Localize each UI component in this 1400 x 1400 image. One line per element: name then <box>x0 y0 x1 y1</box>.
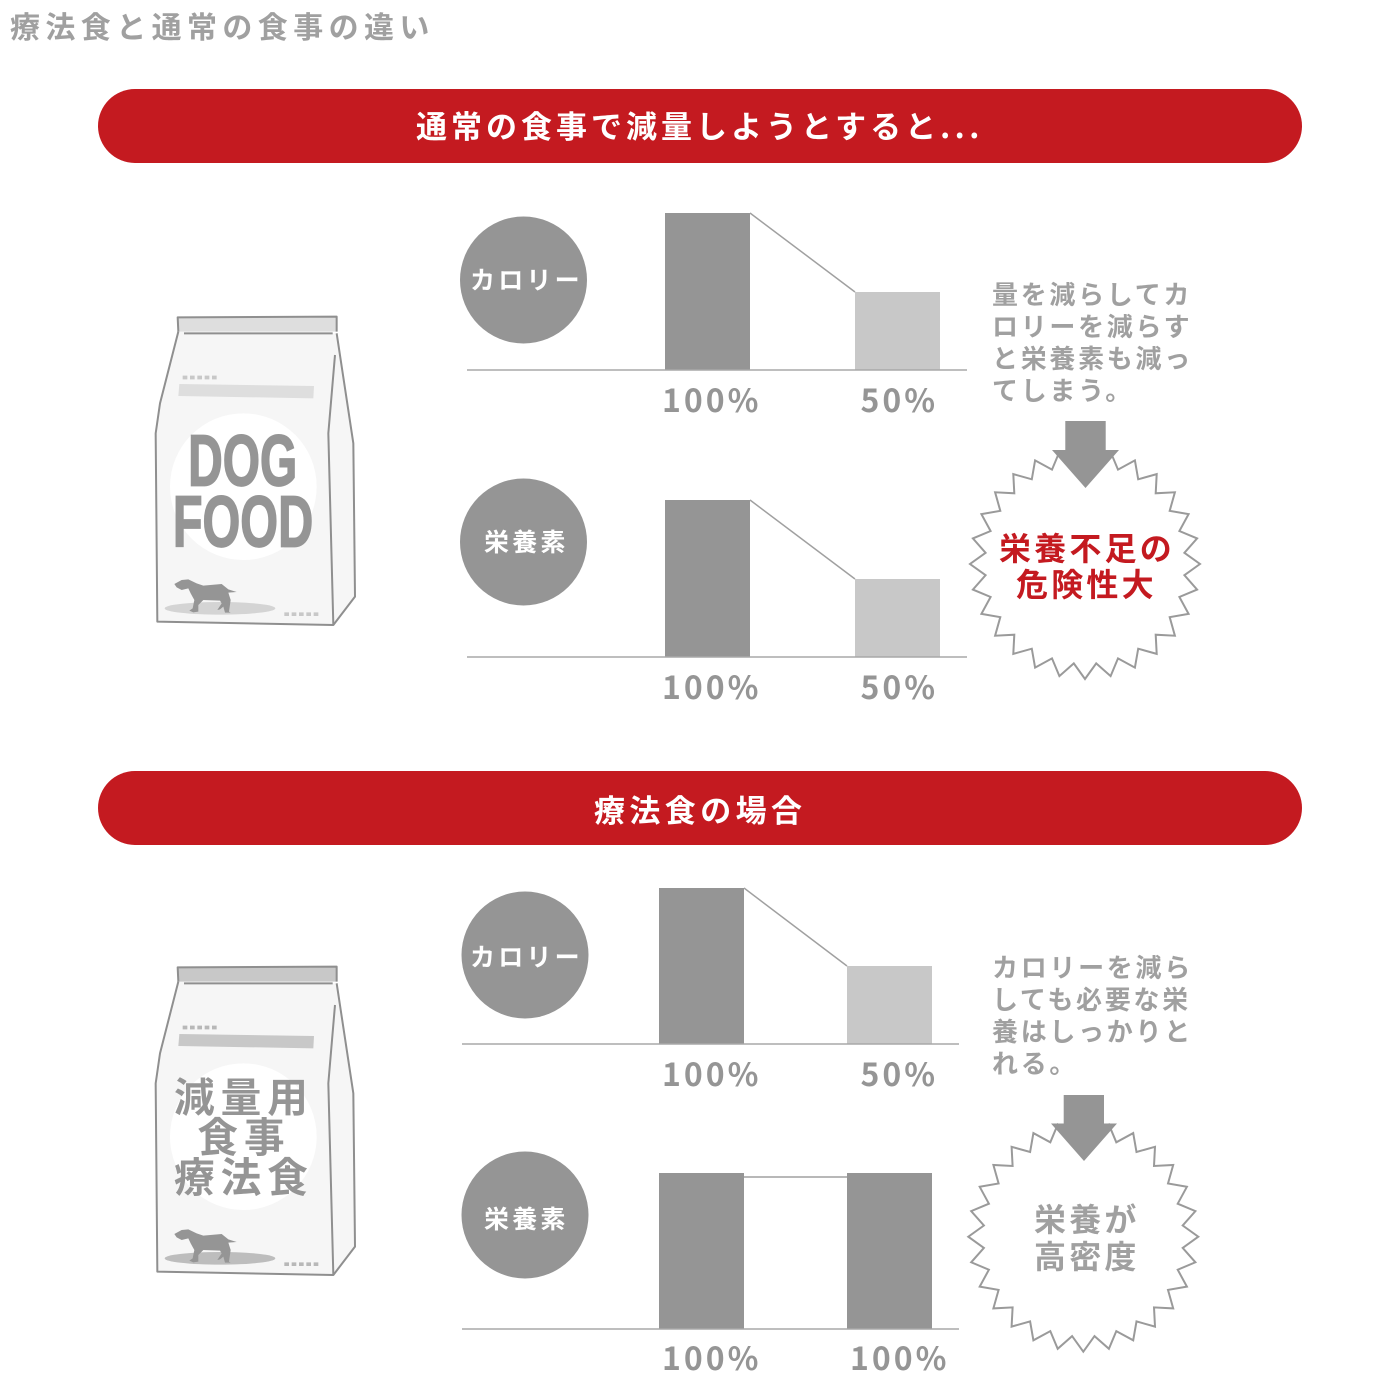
text block: therapeutic diet note <box>992 948 1193 1081</box>
chart: nutrients, normal diet: 50% <box>860 663 938 709</box>
chart: calories, therapeutic diet <box>462 888 959 1096</box>
chart: nutrients, therapeutic diet: 栄養素 <box>484 1200 569 1236</box>
callout: high nutrient density: 栄養が <box>1034 1195 1140 1241</box>
panel: therapeutic diet header: 療法食の場合 <box>594 786 806 831</box>
chart: calories, normal diet: 100% <box>662 376 761 422</box>
text block: normal diet note: ロリーを減らす <box>992 307 1192 344</box>
text block: therapeutic diet note: しても必要な栄 <box>992 980 1191 1017</box>
chart: nutrients, normal diet: 栄養素 <box>484 523 569 559</box>
chart: calories, normal diet: 50% <box>860 376 938 422</box>
arrow: therapeutic diet <box>1051 1095 1117 1161</box>
chart: calories, therapeutic diet: 100% <box>662 1050 761 1096</box>
icon: therapeutic food bag: 減量用 <box>174 1065 314 1124</box>
text block: normal diet note: てしまう。 <box>992 371 1134 408</box>
arrow: normal diet <box>1052 421 1119 488</box>
chart: nutrients, normal diet: 100% <box>662 663 761 709</box>
callout: nutrient deficiency risk: 危険性大 <box>1016 560 1157 606</box>
panel: therapeutic diet header <box>98 771 1302 845</box>
title: 療法食と通常の食事の違い <box>10 3 435 47</box>
icon: dog food bag: DOG <box>188 421 297 501</box>
text block: therapeutic diet note: 養はしっかりと <box>992 1012 1193 1049</box>
chart: calories, therapeutic diet: 50% <box>860 1050 938 1096</box>
text block: therapeutic diet note: カロリーを減ら <box>992 948 1193 985</box>
icon: dog food bag <box>156 317 355 625</box>
callout: high nutrient density <box>968 1122 1198 1352</box>
icon: dog food bag: FOOD <box>173 482 313 563</box>
callout: nutrient deficiency risk <box>970 449 1200 679</box>
chart: calories, therapeutic diet: カロリー <box>470 938 583 974</box>
text block: normal diet note: と栄養素も減っ <box>992 339 1193 376</box>
callout: nutrient deficiency risk: 栄養不足の <box>999 524 1175 570</box>
panel: normal diet header <box>98 89 1302 163</box>
icon: therapeutic food bag <box>156 967 355 1275</box>
text block: normal diet note <box>992 275 1193 408</box>
panel: normal diet header: 通常の食事で減量しようとすると... <box>416 102 984 147</box>
icon: therapeutic food bag: 療法食 <box>174 1145 314 1204</box>
chart: nutrients, normal diet <box>460 478 967 709</box>
text block: normal diet note: 量を減らしてカ <box>992 275 1192 312</box>
text block: therapeutic diet note: れる。 <box>992 1044 1078 1081</box>
chart: nutrients, therapeutic diet: 100% <box>662 1334 761 1380</box>
chart: nutrients, therapeutic diet <box>462 1152 959 1380</box>
callout: high nutrient density: 高密度 <box>1034 1232 1140 1278</box>
chart: calories, normal diet <box>460 213 967 422</box>
icon: therapeutic food bag: 食事 <box>197 1105 291 1164</box>
chart: nutrients, therapeutic diet: 100% <box>850 1334 949 1380</box>
chart: calories, normal diet: カロリー <box>470 261 583 297</box>
